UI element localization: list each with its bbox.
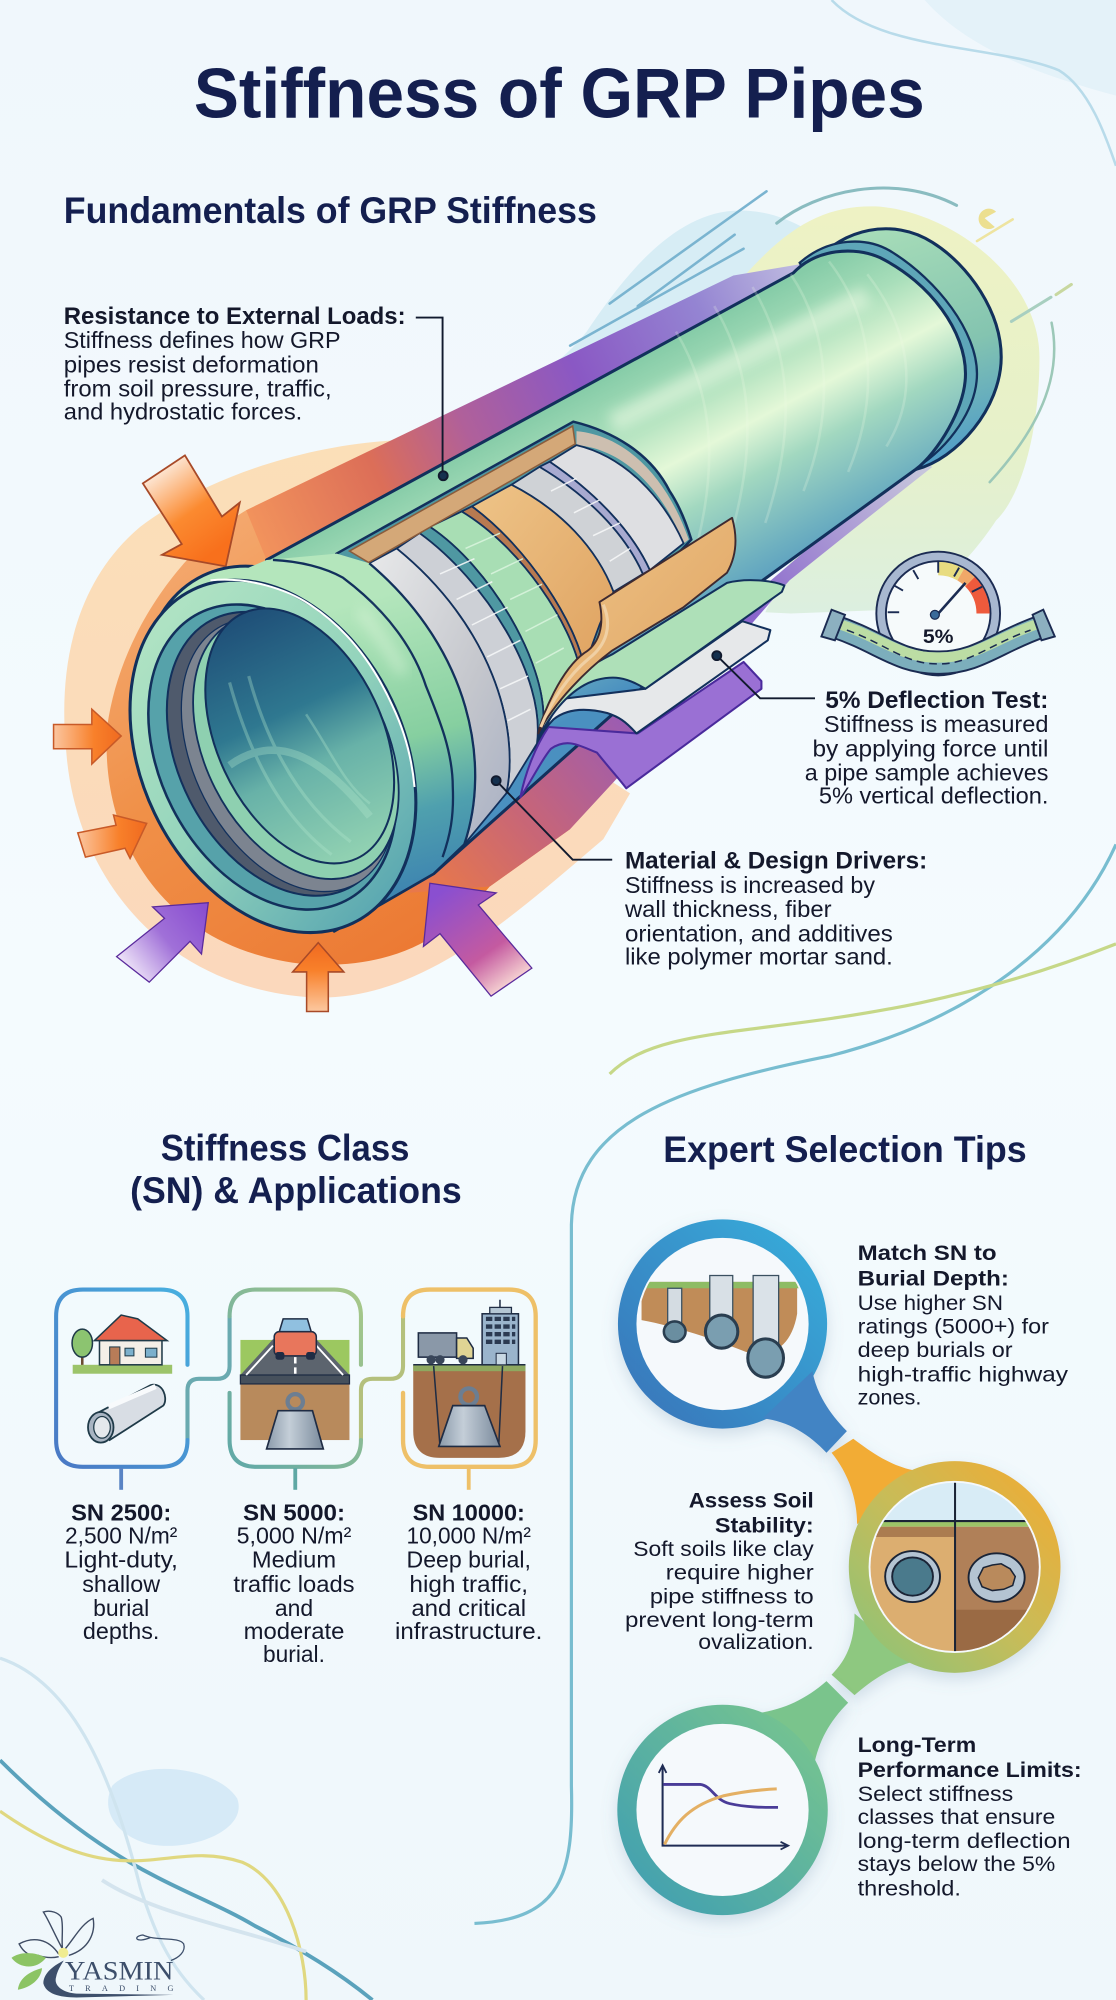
text: tip 2: Assess Soil <box>689 1488 814 1513</box>
arrow: bottom orange <box>293 943 344 1011</box>
text: SN 10000: high traffic, <box>409 1571 528 1597</box>
text: SN 2500: SN 2500: <box>71 1499 171 1525</box>
sand layer fold <box>541 605 608 727</box>
text: tip 2: require higher <box>666 1560 814 1585</box>
text: SN 10000 <box>395 1499 542 1644</box>
text: tip 2: Soft soils like clay <box>633 1536 814 1561</box>
heading: expert selection tips: Expert Selection Tips <box>663 1129 1027 1170</box>
text: SN 10000: 10,000 N/m² <box>407 1522 531 1548</box>
heading: stiffness class: Stiffness Class <box>161 1128 409 1169</box>
icon: weight <box>267 1394 323 1449</box>
pipe mouth rings <box>128 578 418 934</box>
leader line: deflection <box>712 651 815 698</box>
logo wordmark: YASMIN <box>65 1956 173 1986</box>
text: SN 2500 <box>64 1499 178 1644</box>
text: tip 2: Stability: <box>715 1513 814 1538</box>
text: 5% deflection test: by applying force until <box>812 735 1048 761</box>
card: SN 5000 medium traffic <box>230 1290 361 1667</box>
stem <box>119 1468 123 1490</box>
text: SN 5000: moderate <box>244 1618 344 1644</box>
text: tip 1: Use higher SN <box>858 1290 1003 1315</box>
text: tip 2: pipe stiffness to <box>650 1583 814 1608</box>
text: tip 3: Performance Limits: <box>858 1757 1082 1782</box>
text: tip 1 <box>858 1240 1068 1409</box>
text: resistance to external loads: Stiffness defines how GRP <box>64 327 341 353</box>
text: 5% deflection test: a pipe sample achieves <box>805 760 1048 786</box>
text: tip 3: long-term deflection <box>858 1828 1071 1853</box>
card: SN 2500 light duty <box>56 1290 187 1644</box>
text: tip 1: zones. <box>858 1384 921 1409</box>
peeled gray layer <box>538 621 770 740</box>
text: material and design drivers: like polymer mortar sand. <box>625 943 893 969</box>
text: material and design drivers: Stiffness is increased by <box>625 872 875 898</box>
text: resistance to external loads: Resistance to External Loads: <box>64 303 406 329</box>
icon: flower <box>19 1911 94 1958</box>
text: material and design drivers: orientation, and additives <box>625 920 893 946</box>
near collar seam <box>273 560 453 857</box>
pipe body <box>267 251 965 931</box>
logo hook <box>137 1935 184 1960</box>
icon: building <box>482 1300 518 1365</box>
icon: buried pipes <box>638 1276 804 1377</box>
text: tip 2: prevent long-term <box>625 1607 814 1632</box>
text: tip 3: stays below the 5% <box>858 1851 1055 1876</box>
upper colour band behind pipe <box>246 261 816 560</box>
logo subtitle: TRADING <box>69 1984 173 1993</box>
chart: long-term performance curves <box>659 1765 788 1849</box>
heading: stiffness class: (SN) & Applications <box>130 1170 462 1211</box>
text: tip 3: threshold. <box>858 1875 961 1900</box>
near collar silhouette <box>85 519 482 966</box>
icon: tree <box>72 1329 92 1367</box>
text: SN 5000: 5,000 N/m² <box>237 1522 352 1548</box>
text: 5% deflection test <box>805 687 1048 809</box>
connector between cards 1 and 2 <box>187 1316 230 1440</box>
text: SN 5000: SN 5000: <box>243 1499 345 1525</box>
peeled green layer <box>541 580 784 733</box>
stem <box>467 1468 471 1490</box>
lower colour band behind pipe <box>408 459 932 893</box>
cutaway window frame <box>337 422 691 816</box>
text: resistance to external loads: and hydrostatic forces. <box>64 399 302 425</box>
fibre and sand texture <box>440 478 630 721</box>
text: 5% deflection test: 5% vertical deflection. <box>819 783 1048 809</box>
text: SN 10000: Deep burial, <box>407 1547 531 1573</box>
text: SN 2500: Light-duty, <box>64 1547 178 1573</box>
tip 2 ring <box>832 1439 1061 1695</box>
text: SN 2500: 2,500 N/m² <box>65 1522 178 1548</box>
wood strip under frame <box>349 426 575 562</box>
far collar <box>816 229 1001 469</box>
stem <box>293 1468 297 1490</box>
text: tip 2 <box>625 1488 814 1654</box>
connector between cards 2 and 3 <box>361 1316 403 1440</box>
card: SN 10000 deep burial <box>395 1290 542 1644</box>
text: tip 1: Burial Depth: <box>858 1266 1009 1291</box>
leader line: material <box>492 776 612 860</box>
text: material and design drivers <box>624 848 927 969</box>
near collar highlight <box>360 610 403 673</box>
logo: Yasmin Trading <box>11 1911 184 1997</box>
text: tip 1: Match SN to <box>858 1240 997 1265</box>
text: 5% deflection test: 5% Deflection Test: <box>825 687 1048 713</box>
inner light strip <box>576 431 689 543</box>
icon: deflection gauge: 5% <box>923 626 954 648</box>
text: tip 2: ovalization. <box>698 1629 814 1654</box>
text: material and design drivers: wall thickness, fiber <box>624 896 832 922</box>
title: Stiffness of GRP Pipes <box>194 53 925 132</box>
text: tip 1: high-traffic highway <box>858 1361 1068 1386</box>
heading: stiffness class <box>130 1128 462 1211</box>
text: tip 3: Select stiffness <box>858 1781 1013 1806</box>
text: SN 2500: shallow <box>82 1571 161 1597</box>
motion lines <box>570 188 1071 482</box>
body highlights <box>612 261 906 574</box>
text: resistance to external loads <box>64 303 406 425</box>
text: SN 10000: infrastructure. <box>395 1618 542 1644</box>
heading: fundamentals: Fundamentals of GRP Stiffness <box>64 190 597 231</box>
icon: pipe <box>88 1385 165 1443</box>
text: SN 5000: and <box>275 1595 313 1621</box>
peeled sand layer <box>538 518 735 733</box>
text: tip 1: deep burials or <box>858 1337 1013 1362</box>
text: SN 5000: Medium <box>252 1547 336 1573</box>
icon: truck <box>418 1333 473 1364</box>
arrow: left orange <box>54 709 121 764</box>
text: tip 3 <box>858 1732 1082 1900</box>
text: material and design drivers: Material & Design Drivers: <box>625 848 927 874</box>
arrow: lower left orange <box>78 815 147 858</box>
text: resistance to external loads: from soil pressure, traffic, <box>64 376 332 402</box>
leader line: external loads <box>416 318 448 480</box>
arrow: purple bottom right <box>423 883 532 996</box>
panel: stiffness class cards <box>56 1290 542 1667</box>
text: tip 3: classes that ensure <box>858 1804 1055 1829</box>
text: SN 2500: burial <box>93 1595 149 1621</box>
near collar <box>204 554 475 931</box>
logo swoosh <box>43 1960 173 1997</box>
icon: house <box>73 1315 172 1374</box>
arrow: purple lower left <box>117 903 208 982</box>
icon: leaves <box>11 1953 46 1990</box>
icon: car <box>274 1319 316 1360</box>
pipe illustration with load arrows <box>54 188 1071 1011</box>
text: 5% deflection test: Stiffness is measured <box>824 711 1048 737</box>
text: SN 5000: burial. <box>263 1641 325 1667</box>
wall layers <box>369 445 684 844</box>
icon: heavy weight <box>439 1388 500 1446</box>
far teal ring <box>800 242 977 468</box>
text: SN 2500: depths. <box>83 1618 159 1644</box>
arrow: top orange <box>143 455 240 566</box>
text: tip 1: ratings (5000+) for <box>858 1314 1049 1339</box>
text: SN 10000: and critical <box>411 1595 526 1621</box>
text: resistance to external loads: pipes resist deformation <box>64 351 319 377</box>
icon: soil comparison <box>867 1480 1042 1658</box>
text: SN 5000 <box>233 1499 355 1667</box>
backdrop blobs <box>64 206 1039 998</box>
text: tip 3: Long-Term <box>858 1732 976 1757</box>
icon: deflection gauge <box>821 552 1055 675</box>
text: SN 10000: SN 10000: <box>413 1499 525 1525</box>
tip 3 ring <box>617 1681 848 1915</box>
peeled purple layer <box>520 662 761 797</box>
tip 1 ring <box>618 1219 847 1453</box>
panel: expert selection tips <box>617 1219 1082 1915</box>
icon: road scene <box>240 1339 349 1440</box>
near collar outline <box>334 563 475 931</box>
text: SN 5000: traffic loads <box>233 1571 355 1597</box>
icon: soil trench <box>413 1365 525 1458</box>
